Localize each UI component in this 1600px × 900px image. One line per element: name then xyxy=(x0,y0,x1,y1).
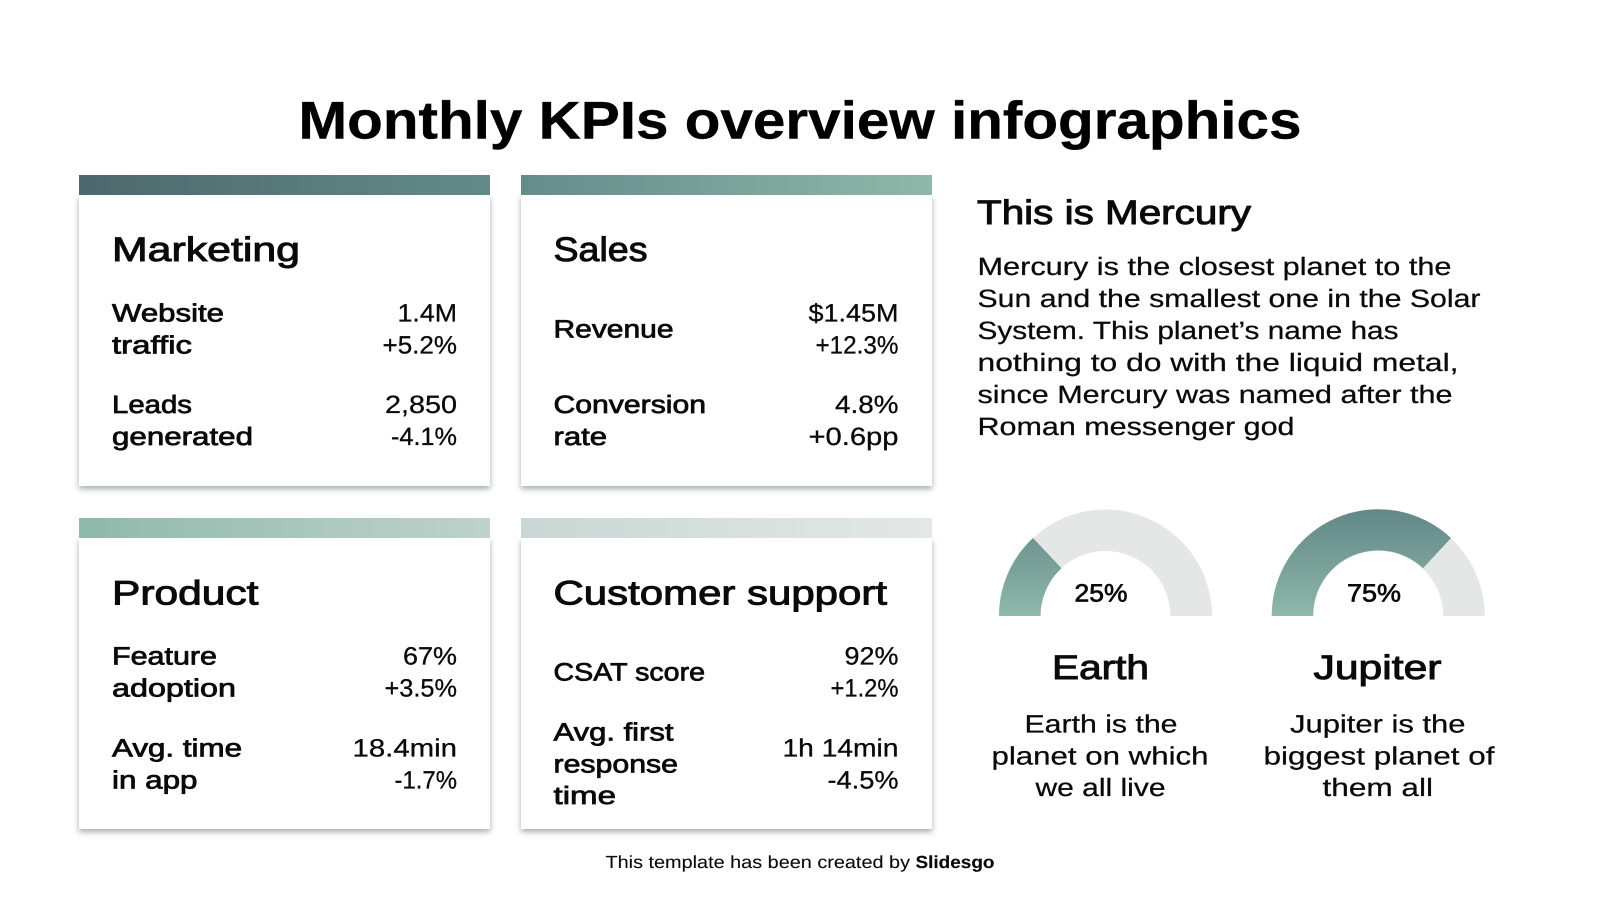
metric: average time in app: Avg. time xyxy=(112,734,242,762)
metric: leads generated: Leads xyxy=(112,391,192,419)
body text: mercury description: Sun and the smallest one in the Solar xyxy=(978,285,1480,313)
metric: leads generated: 2,850 xyxy=(385,391,457,419)
metric: average time in app xyxy=(112,734,457,794)
metric: feature adoption: +3.5% xyxy=(384,674,457,702)
metric: average first response time: response xyxy=(554,750,678,778)
title: Monthly KPIs overview infographics xyxy=(298,92,1302,150)
metric: leads generated xyxy=(112,391,457,451)
metric: average first response time: 1h 14min xyxy=(782,734,898,762)
metric: csat score xyxy=(554,642,898,702)
metric: website traffic: Website xyxy=(112,299,224,327)
metric: revenue xyxy=(554,299,898,359)
metric: conversion rate: 4.8% xyxy=(835,391,898,419)
metric: average time in app: 18.4min xyxy=(352,734,457,762)
metric: website traffic: 1.4M xyxy=(398,299,457,327)
text block: earth xyxy=(992,649,1208,802)
text block: jupiter xyxy=(1264,649,1495,802)
description: jupiter xyxy=(1264,710,1495,802)
metric: leads generated: -4.1% xyxy=(391,423,457,451)
panel: product xyxy=(79,518,490,829)
metric: average first response time xyxy=(554,718,898,810)
description: jupiter: biggest planet of xyxy=(1264,742,1495,770)
gauge value: 25%: 25% xyxy=(1074,580,1128,608)
body text: mercury description: nothing to do with the liquid metal, xyxy=(978,349,1458,377)
heading: this is mercury: This is Mercury xyxy=(977,194,1251,232)
description: jupiter: Jupiter is the xyxy=(1290,710,1466,738)
metric: average time in app: -1.7% xyxy=(394,766,457,794)
description: earth xyxy=(992,710,1208,802)
description: jupiter: them all xyxy=(1322,774,1433,802)
metric: average first response time: Avg. first xyxy=(554,718,674,746)
heading: earth: Earth xyxy=(1052,649,1149,687)
panel: sales xyxy=(521,175,932,486)
metric: revenue: Revenue xyxy=(554,316,674,344)
footer credit: This template has been created by xyxy=(606,852,910,872)
metric: average time in app: in app xyxy=(112,766,198,794)
heading: marketing: Marketing xyxy=(112,231,300,269)
metric: revenue: $1.45M xyxy=(808,299,898,327)
metric: feature adoption: 67% xyxy=(403,642,457,670)
metric: revenue: +12.3% xyxy=(816,331,898,359)
panel: customer support xyxy=(521,518,932,829)
metric: conversion rate: +0.6pp xyxy=(808,423,898,451)
body text: mercury description: Mercury is the closest planet to the xyxy=(978,253,1452,281)
metric: leads generated: generated xyxy=(112,423,253,451)
metric: conversion rate: rate xyxy=(554,423,607,451)
metric: csat score: CSAT score xyxy=(554,658,705,686)
metric: average first response time: -4.5% xyxy=(828,766,898,794)
description: earth: Earth is the xyxy=(1024,710,1178,738)
metric: feature adoption: Feature xyxy=(112,642,217,670)
gauge: jupiter 75% xyxy=(1272,509,1485,616)
metric: csat score: 92% xyxy=(844,642,898,670)
heading: product: Product xyxy=(112,574,259,612)
heading: jupiter: Jupiter xyxy=(1314,649,1442,687)
body text: mercury description xyxy=(978,253,1480,441)
description: earth: we all live xyxy=(1034,774,1166,802)
metric: feature adoption: adoption xyxy=(112,674,236,702)
metric: average first response time: time xyxy=(554,782,616,810)
body text: mercury description: Roman messenger god xyxy=(978,413,1294,441)
metric: website traffic: traffic xyxy=(112,331,192,359)
footer credit xyxy=(606,852,994,872)
panel: marketing xyxy=(79,175,490,486)
gauge: earth 25% xyxy=(999,510,1212,616)
metric: conversion rate xyxy=(554,391,898,451)
metric: conversion rate: Conversion xyxy=(554,391,706,419)
text block: this is mercury xyxy=(977,194,1480,441)
body text: mercury description: System. This planet’s name has xyxy=(978,317,1398,345)
body text: mercury description: since Mercury was named after the xyxy=(978,381,1452,409)
description: earth: planet on which xyxy=(992,742,1208,770)
heading: customer support: Customer support xyxy=(554,574,888,612)
gauge value: 75%: 75% xyxy=(1347,580,1401,608)
metric: csat score: +1.2% xyxy=(830,674,898,702)
metric: website traffic xyxy=(112,299,457,359)
metric: feature adoption xyxy=(112,642,457,702)
heading: sales: Sales xyxy=(554,231,648,269)
footer credit: Slidesgo xyxy=(916,852,994,872)
metric: website traffic: +5.2% xyxy=(382,331,457,359)
